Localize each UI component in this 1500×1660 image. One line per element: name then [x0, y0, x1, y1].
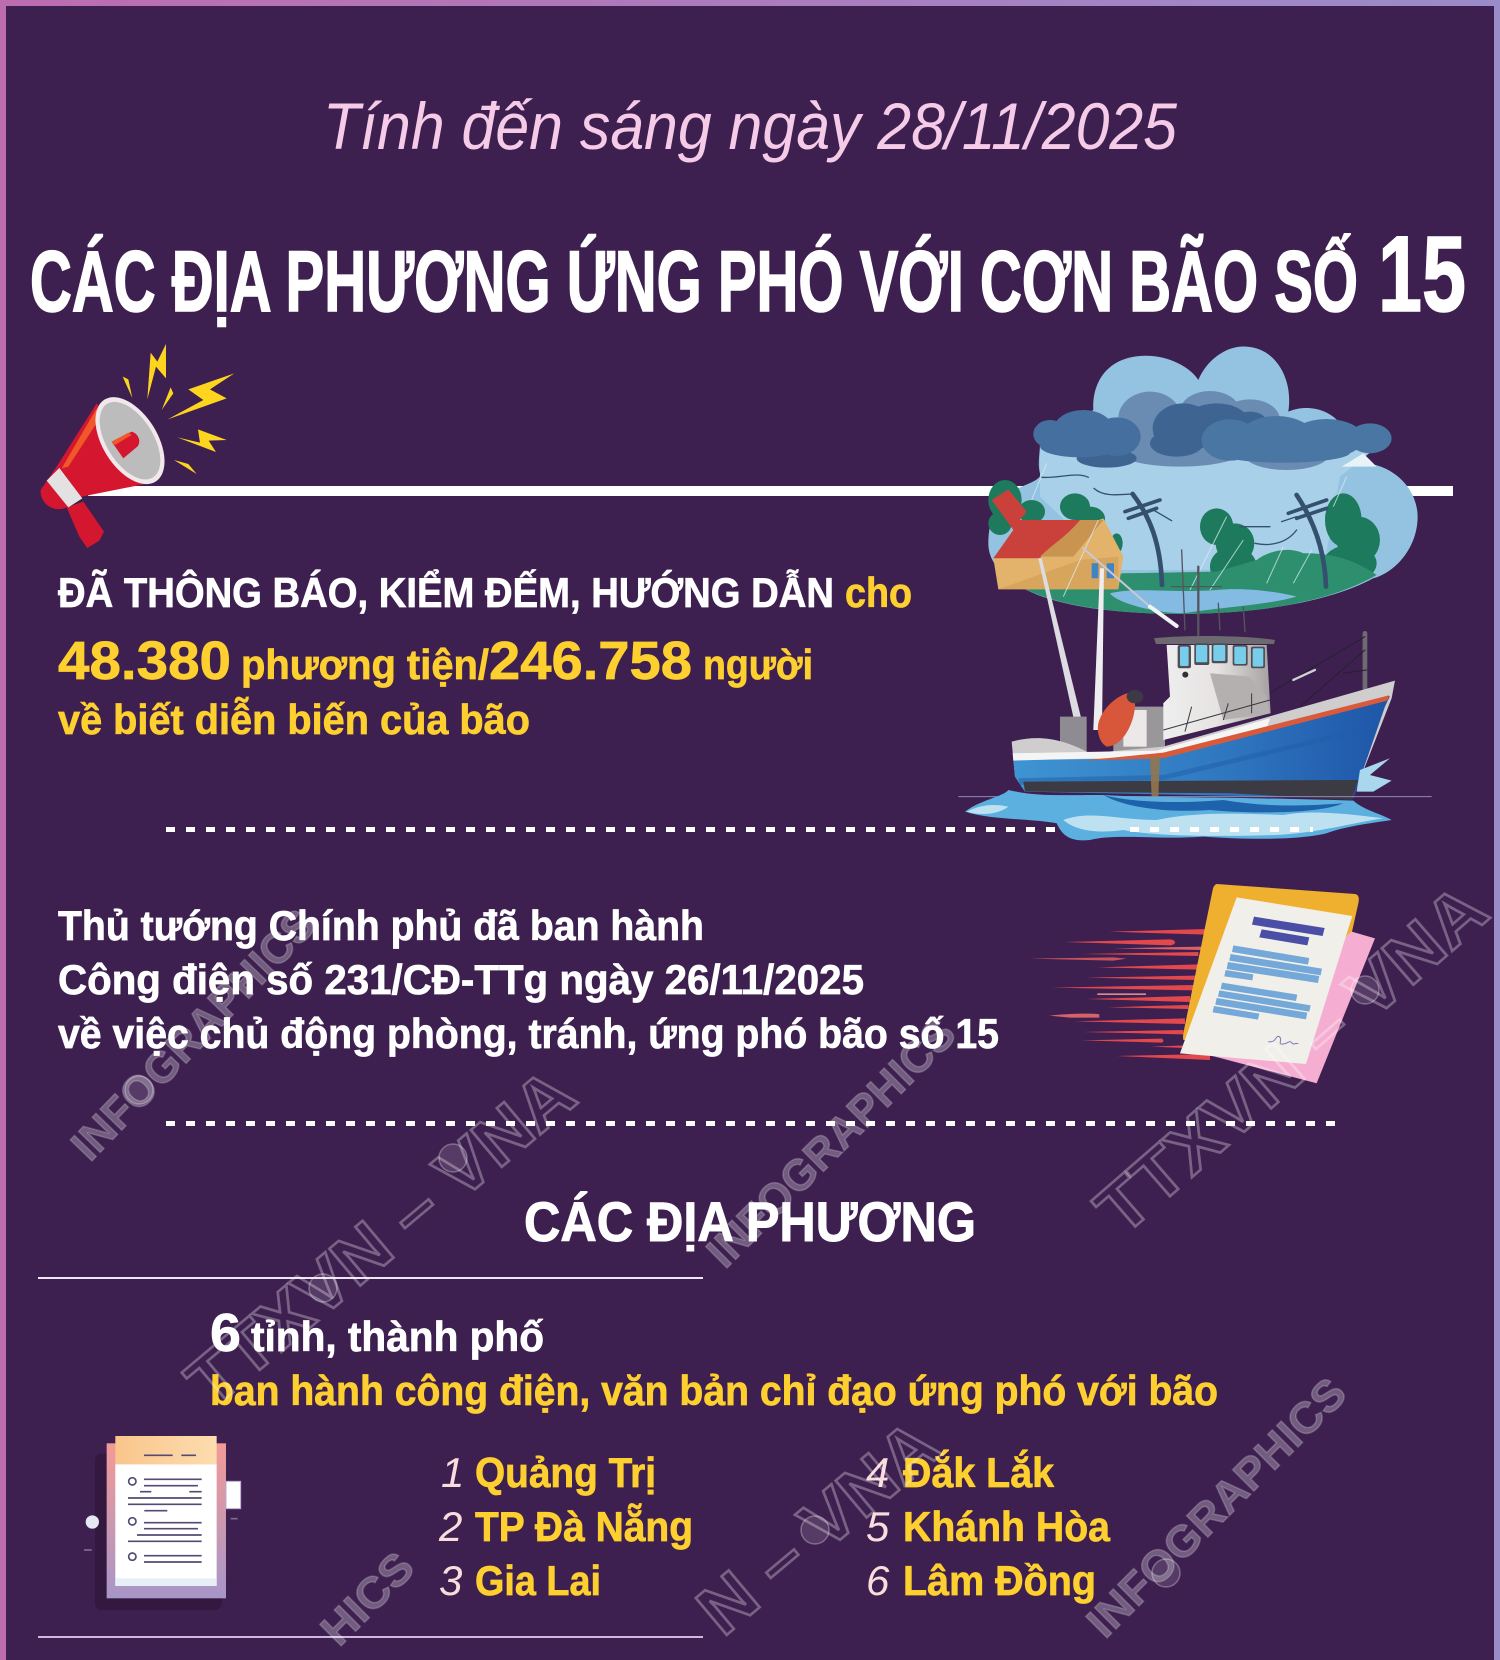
ground and flood water [1023, 550, 1377, 614]
province list column 2 [866, 1448, 1111, 1604]
watermarks: TTXVN – VNA [1081, 869, 1500, 1249]
province 1: 1 [441, 1449, 464, 1496]
utility poles [1042, 475, 1327, 587]
provinces count: 6 [210, 1303, 241, 1363]
icon: clipboard checklist [84, 1436, 241, 1610]
dotted divider 1 [166, 827, 1313, 832]
icon: storm cloud scene [958, 347, 1432, 840]
dispatch line 1: Thủ tướng Chính phủ đã ban hành [58, 902, 704, 949]
notification headline: cho [845, 569, 912, 616]
white divider line with megaphone [88, 486, 1453, 496]
trees [988, 480, 1380, 587]
watermarks [62, 869, 1500, 1655]
province 6: 6 [866, 1557, 890, 1604]
dispatch line 3: về việc chủ động phòng, tránh, ứng phó bão số 15 [58, 1010, 999, 1057]
notification closing line: về biết diễn biến của bão [58, 695, 530, 743]
second text block: prime minister dispatch [58, 902, 999, 1057]
province 3: Gia Lai [475, 1557, 601, 1604]
cloud backdrop [988, 347, 1418, 614]
main title: 15 [1378, 213, 1466, 334]
vehicle and people counts: người [703, 641, 813, 688]
sea water [958, 795, 1432, 798]
dispatch line 2: Công điện số 231/CĐ-TTg ngày 26/11/2025 [58, 956, 864, 1003]
rain streaks [1032, 463, 1347, 597]
dotted divider 2 [166, 1121, 1336, 1126]
vehicle and people counts: phương tiện/ [241, 641, 489, 688]
watermarks: INFOGRAPHICS [697, 1009, 965, 1277]
province 6: Lâm Đồng [903, 1557, 1096, 1604]
house [992, 489, 1123, 589]
date subtitle: Tính đến sáng ngày 28/11/2025 [323, 89, 1177, 163]
upper thin divider [38, 1277, 703, 1279]
watermarks: TTXVN – VNA [172, 1053, 589, 1421]
icon: megaphone [41, 344, 234, 548]
province 4: Đắk Lắk [903, 1448, 1055, 1496]
icon: flying document [1030, 884, 1375, 1083]
watermarks: INFOGRAPHICS [62, 900, 325, 1170]
cabin [1163, 645, 1271, 740]
deck cargo and net [1060, 717, 1087, 753]
province 2: TP Đà Nẵng [475, 1502, 693, 1550]
six provinces statement [210, 1303, 1218, 1414]
provinces action: ban hành công điện, văn bản chỉ đạo ứng phó với bão [210, 1367, 1218, 1414]
notification headline: ĐÃ THÔNG BÁO, KIỂM ĐẾM, HƯỚNG DẪN [58, 568, 834, 616]
province 2: 2 [438, 1503, 462, 1550]
province list column 1 [438, 1449, 693, 1604]
watermarks: N – VNA [683, 1405, 953, 1649]
dark storm clouds [1033, 391, 1392, 470]
province 5: 5 [866, 1503, 890, 1550]
watermarks: INFOGRAPHICS [1077, 1368, 1356, 1647]
first text block: notification statistics [58, 568, 912, 743]
fishing boat [958, 548, 1432, 840]
provinces count: tỉnh, thành phố [251, 1313, 544, 1360]
province 4: 4 [866, 1449, 889, 1496]
section heading: CÁC ĐỊA PHƯƠNG [524, 1190, 976, 1253]
masts [1038, 558, 1082, 720]
hull [1012, 681, 1395, 797]
vehicle and people counts: 246.758 [489, 631, 692, 691]
province 1: Quảng Trị [475, 1449, 656, 1496]
vehicle and people counts: 48.380 [58, 631, 231, 691]
watermarks: HICS [311, 1543, 424, 1655]
province 3: 3 [439, 1557, 462, 1604]
lower thin divider [38, 1636, 703, 1638]
province 5: Khánh Hòa [903, 1503, 1111, 1550]
